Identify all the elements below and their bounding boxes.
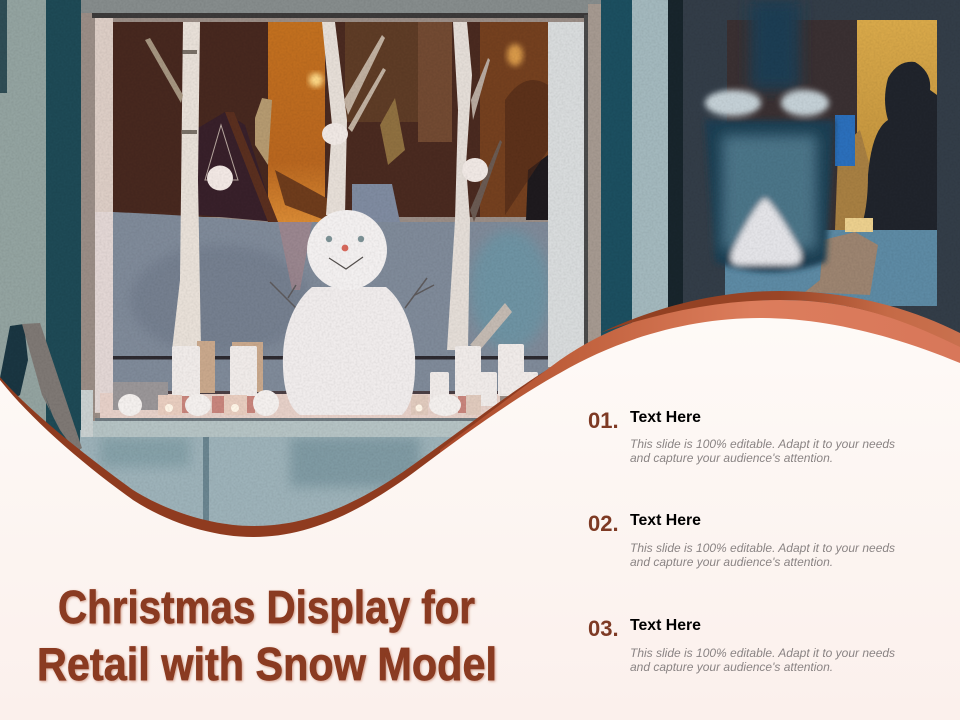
reflection pink <box>278 222 312 290</box>
birch tree right <box>447 22 512 350</box>
snow speck texture <box>0 0 960 540</box>
A-frame tent silhouette <box>198 112 276 222</box>
candles <box>172 344 538 406</box>
teal right <box>601 0 633 340</box>
description 01: This slide is 100% editable. Adapt it to your needs <box>630 437 895 451</box>
stone block left <box>113 382 168 410</box>
dark wedge on curtain <box>275 170 330 222</box>
snow shading <box>130 245 310 355</box>
frame left lower <box>81 390 93 437</box>
paper box <box>845 218 873 232</box>
number 02: 02. <box>588 511 619 536</box>
snowman arms <box>270 278 434 308</box>
snowballs <box>118 390 461 416</box>
wall strip top left <box>0 0 7 93</box>
warm lamp <box>507 44 523 66</box>
number 03: 03. <box>588 616 619 641</box>
snow backdrop <box>113 212 548 392</box>
title <box>37 581 497 690</box>
swoosh: orange band <box>440 300 960 480</box>
white right strip <box>548 22 584 367</box>
door lower blue <box>725 230 937 306</box>
clip left <box>255 98 272 165</box>
snow teal right <box>470 230 550 350</box>
description 02: This slide is 100% editable. Adapt it to your needs <box>630 541 895 555</box>
frame right wood <box>588 4 601 354</box>
frame top <box>81 0 601 13</box>
door window interior <box>727 20 857 230</box>
number 01: 01. <box>588 408 619 433</box>
description 03: and capture your audience's attention. <box>630 660 833 674</box>
blurred lantern <box>705 0 835 272</box>
cream panel <box>0 318 960 720</box>
snowman <box>283 210 415 415</box>
dark ledge line upper <box>113 356 548 360</box>
description 03: This slide is 100% editable. Adapt it to your needs <box>630 646 895 660</box>
orange curtain <box>268 22 325 222</box>
pale strip lower <box>95 212 113 412</box>
blue sign <box>835 115 855 166</box>
birch tree centre <box>322 22 386 215</box>
teal window frame left <box>46 0 82 450</box>
frame right dark line <box>584 15 588 360</box>
ornament right <box>462 158 488 182</box>
door frame <box>683 0 960 340</box>
list item 01 <box>588 408 898 465</box>
heading 01: Text Here <box>630 409 701 426</box>
description 01: and capture your audience's attention. <box>630 451 833 465</box>
frame shadow line <box>92 13 588 18</box>
birch tree left <box>145 22 201 350</box>
hanging ornament tree-left <box>205 125 238 190</box>
heading 03: Text Here <box>630 617 701 634</box>
swoosh: dark top wedge <box>600 291 960 347</box>
concrete stain left <box>100 437 190 467</box>
concrete joint <box>203 437 209 529</box>
pink floor blocks <box>181 396 468 413</box>
brown tent edge <box>225 112 278 222</box>
dark ledge line lower <box>113 391 513 394</box>
title: Christmas Display for <box>58 581 475 633</box>
straw plant <box>835 130 882 232</box>
description 02: and capture your audience's attention. <box>630 555 833 569</box>
sill shadow <box>95 418 505 421</box>
title: Retail with Snow Model <box>37 638 497 690</box>
chair <box>352 184 400 222</box>
clip right <box>380 98 405 165</box>
black gap <box>668 0 683 320</box>
door window lit wall <box>857 20 937 230</box>
interior brown wall left <box>113 22 268 212</box>
sweater stack <box>805 232 878 295</box>
concrete stain <box>290 437 420 487</box>
leaning sign board <box>0 323 82 452</box>
shop interior <box>113 22 549 217</box>
swoosh: dark brown band <box>0 345 600 560</box>
window sill <box>92 421 512 437</box>
ornament centre <box>322 123 348 145</box>
lamp glow <box>309 73 323 87</box>
heading 02: Text Here <box>630 512 701 529</box>
lit shelf right <box>480 22 548 217</box>
concrete column <box>632 0 669 330</box>
wooden frame <box>81 0 601 438</box>
glass votives <box>158 395 481 415</box>
concrete wall left <box>0 0 48 450</box>
silhouette person <box>860 62 937 230</box>
concrete below window <box>80 430 510 540</box>
warm panels right <box>418 22 452 142</box>
pale floor strip <box>100 393 500 418</box>
dark figure centre right <box>505 80 548 215</box>
photo: shop window with snowman <box>0 0 960 540</box>
pale left strip <box>95 18 113 413</box>
wooden candle stands <box>197 341 263 393</box>
warm panels centre <box>345 22 420 122</box>
dark figure right <box>526 155 548 220</box>
list item 02 <box>588 511 898 569</box>
list item 03 <box>588 616 898 674</box>
